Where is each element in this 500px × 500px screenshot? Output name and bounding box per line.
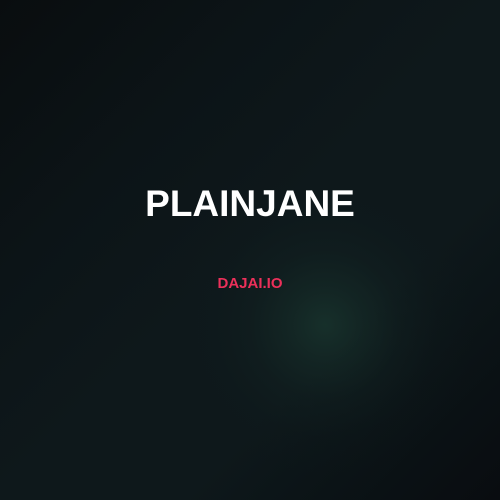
subtitle: DAJAI.IO xyxy=(217,275,282,292)
title: PLAINJANE xyxy=(145,183,355,224)
